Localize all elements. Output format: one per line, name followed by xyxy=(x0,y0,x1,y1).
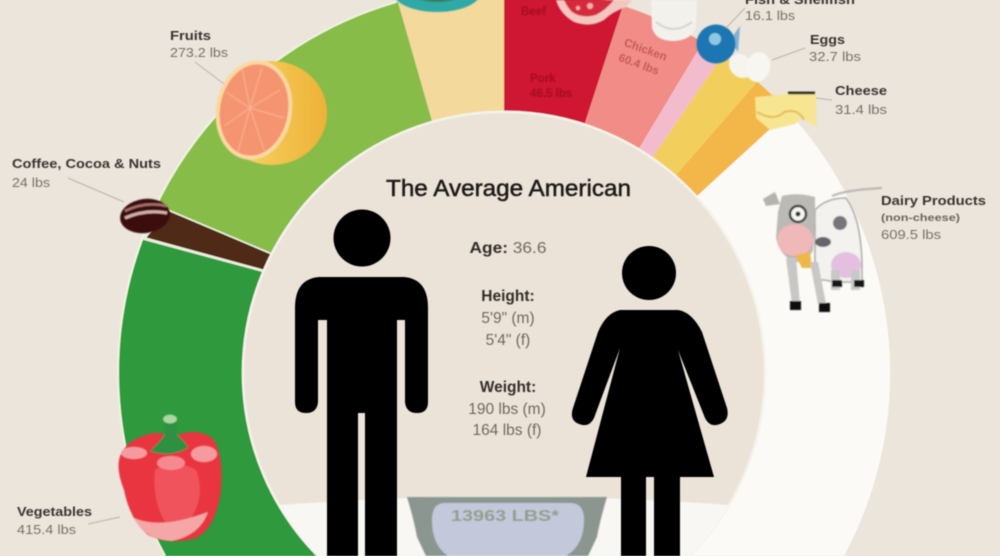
label: pork xyxy=(530,73,572,100)
icon: cheese wedge xyxy=(755,93,816,130)
label: dairy products: (non-cheese) xyxy=(881,212,960,224)
icon: plate xyxy=(393,0,481,12)
label: chicken: 60.4 lbs xyxy=(617,52,661,78)
label: coffee, cocoa and nuts xyxy=(12,156,161,190)
label: cheese: Cheese xyxy=(835,83,887,98)
label: eggs: Eggs xyxy=(810,32,845,47)
icon: coffee bean xyxy=(118,196,172,236)
segment: eggs xyxy=(652,58,758,176)
label: cheese: 31.4 lbs xyxy=(835,102,888,117)
segment: grains xyxy=(398,0,505,121)
figure: woman xyxy=(572,246,728,556)
ring outer highlight: left side xyxy=(118,2,396,556)
segment: fruits xyxy=(159,2,432,254)
icon: eggs xyxy=(724,49,773,85)
segment: dairy products xyxy=(504,112,890,556)
label: dairy products: Dairy Products xyxy=(881,193,986,208)
label: chicken xyxy=(617,37,668,79)
icon: grapefruit xyxy=(208,54,327,166)
stat: weight: 164 lbs (f) xyxy=(473,422,541,439)
label: pork: 46.5 lbs xyxy=(530,88,572,100)
icon: glass of milk xyxy=(651,0,697,41)
label: pork: Pork xyxy=(530,73,556,85)
label: dairy products: 609.5 lbs xyxy=(881,227,942,242)
label: cheese xyxy=(835,83,888,117)
segment: red meat and pork xyxy=(503,0,623,124)
label: eggs xyxy=(809,32,862,64)
label: vegetables: 415.4 lbs xyxy=(17,522,77,537)
label: fish and shellfish xyxy=(745,0,855,23)
stat: weight xyxy=(468,379,546,439)
label: eggs: 32.7 lbs xyxy=(809,49,862,64)
label: fruits xyxy=(170,28,229,60)
title: The Average American xyxy=(386,175,631,201)
segment: cheese xyxy=(676,82,774,196)
center disc xyxy=(243,112,765,556)
scale reading: 13963 LBS* xyxy=(451,508,560,525)
icon: cow xyxy=(763,188,882,312)
stat: height xyxy=(481,288,535,349)
stat: weight: Weight: xyxy=(480,379,536,396)
segment: coffee, cocoa and nuts xyxy=(145,210,272,271)
segment: fish and shellfish xyxy=(639,51,717,157)
segment: vegetables xyxy=(119,240,504,556)
stat: height: 5'4" (f) xyxy=(486,332,530,349)
segment: chicken xyxy=(584,6,698,148)
illustrations around the ring xyxy=(118,0,882,541)
label: fish and shellfish: 16.1 lbs xyxy=(745,8,796,23)
icon: fish xyxy=(696,24,740,64)
label: beef: Beef xyxy=(521,6,546,18)
icon: scale xyxy=(407,497,607,556)
stat: height: Height: xyxy=(481,288,535,305)
label: fruits: Fruits xyxy=(170,28,211,43)
label: vegetables: Vegetables xyxy=(17,504,92,519)
stat: weight: 190 lbs (m) xyxy=(468,401,546,418)
label: fruits: 273.2 lbs xyxy=(170,45,229,60)
label: coffee, cocoa and nuts: 24 lbs xyxy=(12,175,51,190)
label: dairy products xyxy=(881,193,986,242)
icon: red pepper xyxy=(118,414,222,541)
label: vegetables xyxy=(17,504,92,537)
donut chart: annual food consumption by category xyxy=(117,0,890,556)
label: coffee, cocoa and nuts: Coffee, Cocoa & Nuts xyxy=(12,156,161,171)
stat: height: 5'9" (m) xyxy=(481,310,535,327)
label: chicken: Chicken xyxy=(622,37,668,64)
icon: meat xyxy=(556,0,632,25)
leader lines xyxy=(68,8,832,524)
floor under figures xyxy=(279,496,729,556)
stat: age: Age: 36.6 xyxy=(470,240,546,257)
figure: man xyxy=(295,210,428,556)
